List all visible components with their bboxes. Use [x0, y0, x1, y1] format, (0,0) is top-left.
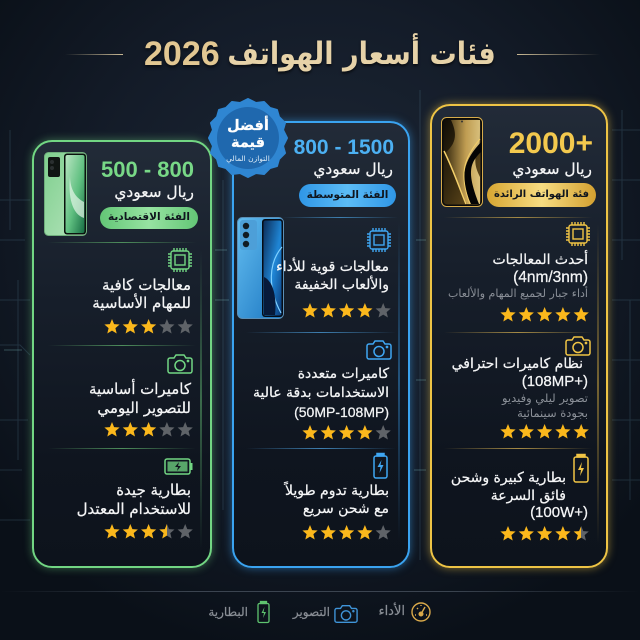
legend	[208, 600, 431, 624]
panel: mid tier	[226, 115, 416, 574]
battery text: بطارية كبيرة وشحن	[451, 470, 566, 486]
camera text line 2: للتصوير اليومي	[97, 399, 191, 417]
icon: chip	[566, 222, 590, 246]
camera text: نظام كاميرات احترافي	[452, 356, 583, 372]
stars 4 of 5	[302, 303, 391, 318]
panel: flagship tier	[424, 98, 614, 574]
icon: battery	[257, 600, 270, 624]
icon: battery	[373, 452, 388, 479]
processor text line 2: والألعاب الخفيفة	[294, 277, 389, 293]
feature: battery	[284, 452, 391, 540]
feature: processor	[92, 248, 193, 334]
feature: camera	[253, 340, 392, 440]
price: 2000+	[509, 127, 593, 160]
icon: camera	[334, 605, 358, 623]
feature: battery	[77, 458, 193, 538]
icon: gauge	[411, 602, 431, 622]
processor text: معالجات قوية للأداء	[276, 259, 389, 275]
tier badge	[299, 184, 396, 207]
currency: ريال سعودي	[114, 183, 194, 201]
title: 2026	[144, 35, 220, 73]
camera spec: (50MP-108MP)	[294, 404, 389, 420]
title: فئات أسعار الهواتف	[228, 36, 496, 72]
currency: ريال سعودي	[512, 160, 592, 178]
camera spec: (108MP+)	[522, 373, 588, 390]
icon: camera	[565, 336, 591, 356]
stars 4 of 5	[302, 525, 391, 540]
panel: economy tier	[26, 134, 218, 574]
processor note: أداء جبار لجميع المهام والألعاب	[448, 287, 588, 300]
stars 4 of 5	[302, 425, 391, 440]
processor text line 2: للمهام الأساسية	[92, 294, 191, 312]
camera note line 1: تصوير ليلي وفيديو	[502, 391, 588, 405]
tier badge: الفئة الاقتصادية	[108, 211, 190, 223]
price: 800 - 1500	[294, 136, 394, 159]
feature: camera	[89, 354, 193, 436]
processor spec: (4nm/3nm)	[513, 269, 588, 286]
tier badge: الفئة المتوسطة	[307, 189, 388, 201]
camera note line 2: بجودة سينمائية	[517, 406, 588, 420]
feature: camera	[452, 336, 591, 438]
legend: photography: التصوير	[293, 605, 330, 619]
stars 5 of 5	[500, 307, 589, 322]
tier badge	[100, 207, 198, 229]
processor text: أحدث المعالجات	[492, 252, 588, 268]
legend: battery: البطارية	[208, 605, 248, 619]
stars 4.5 of 5	[500, 526, 589, 540]
battery spec: (100W+)	[530, 504, 588, 521]
icon: camera	[167, 354, 193, 374]
feature: processor	[276, 228, 391, 318]
icon: chip	[367, 228, 391, 252]
icon: battery	[164, 458, 192, 475]
battery text line 2: مع شحن سريع	[303, 501, 389, 517]
icon: camera	[366, 340, 392, 360]
battery text: بطارية تدوم طويلاً	[285, 483, 389, 499]
best value badge	[208, 98, 288, 178]
phone: mid tier	[237, 217, 284, 319]
stars 5 of 5	[500, 424, 589, 438]
stars 3.5 of 5	[104, 524, 193, 538]
badge line 2: قيمة	[231, 135, 265, 151]
currency: ريال سعودي	[313, 160, 393, 178]
processor text: معالجات كافية	[102, 276, 191, 294]
stars 3 of 5	[104, 319, 193, 334]
feature: battery	[451, 454, 589, 540]
phone: flagship	[441, 117, 483, 207]
badge line 3: التوازن المالي	[226, 154, 270, 163]
camera text: كاميرات أساسية	[89, 380, 191, 398]
stars 3 of 5	[104, 422, 193, 436]
tier badge: فئة الهواتف الرائدة	[494, 189, 589, 200]
legend: performance: الأداء	[378, 604, 405, 619]
camera text line 2: الاستخدامات بدقة عالية	[253, 385, 389, 401]
camera text: كاميرات متعددة	[298, 366, 389, 382]
icon: chip	[168, 248, 192, 272]
battery text line 2: فائق السرعة	[491, 488, 566, 504]
title	[144, 33, 496, 74]
feature: processor	[448, 222, 590, 322]
phone: economy tier	[44, 152, 87, 236]
tier badge	[487, 183, 596, 207]
battery text: بطارية جيدة	[116, 481, 191, 499]
price: 500 - 800	[101, 157, 194, 182]
icon: battery	[573, 454, 589, 483]
badge line 1: أفضل	[227, 118, 269, 134]
battery text line 2: للاستخدام المعتدل	[77, 500, 191, 518]
